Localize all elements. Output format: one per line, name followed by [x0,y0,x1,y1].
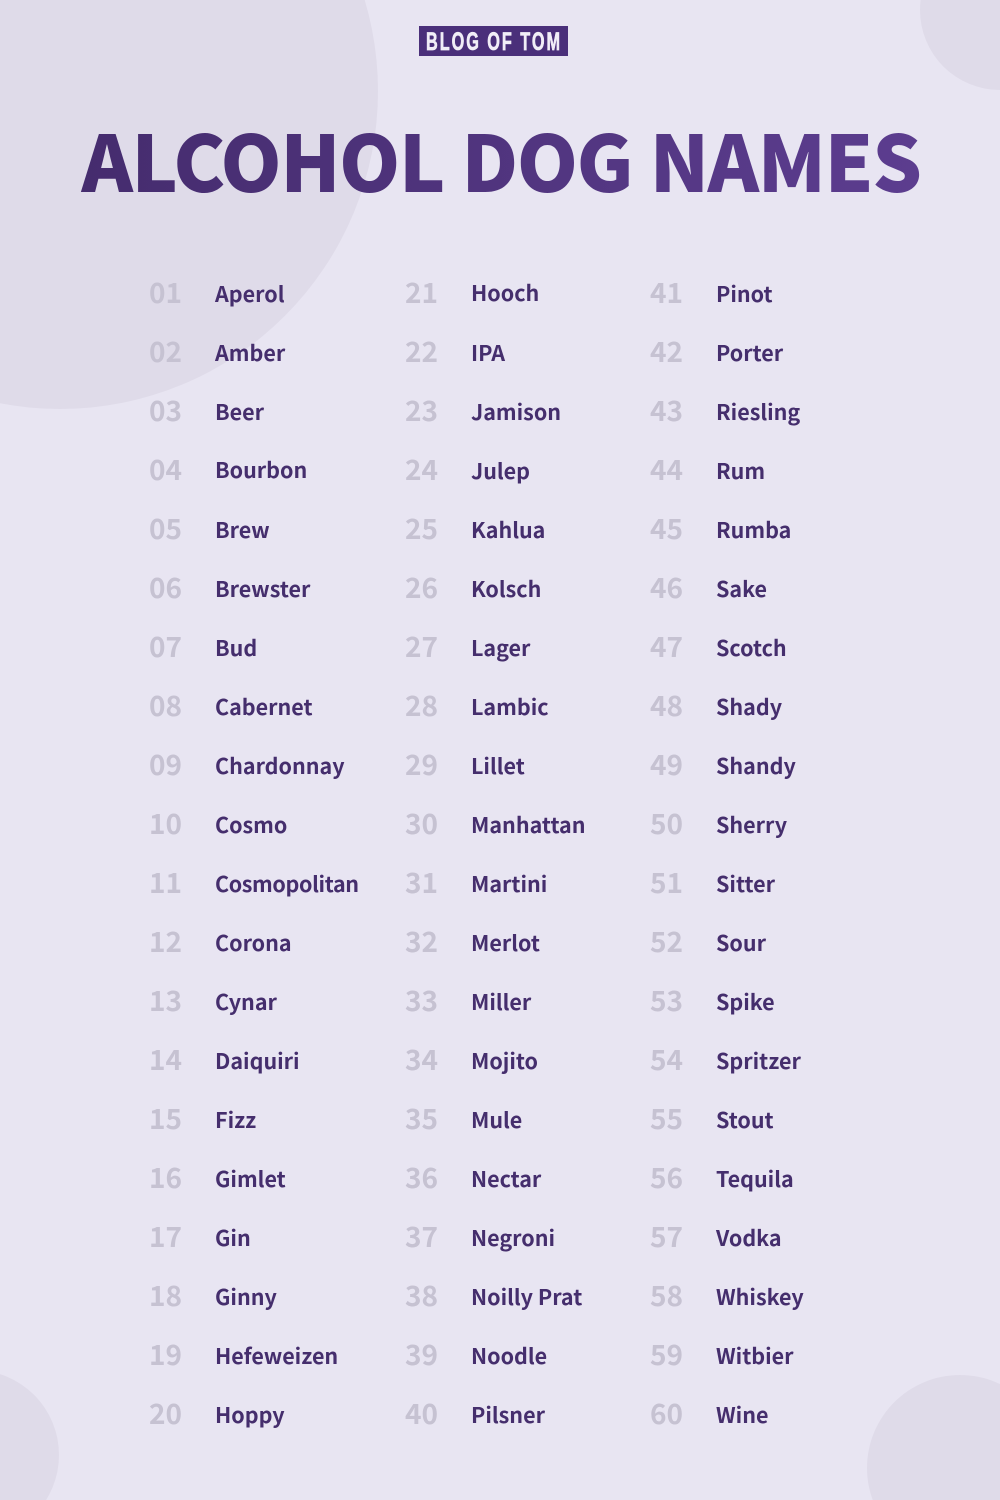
name 37 [405,1216,555,1256]
name 48: 48 [650,685,683,725]
name 27 [405,626,530,666]
name 04: 04 [149,449,182,489]
name 12: Corona [215,927,292,958]
name 31 [405,862,547,902]
name 05: Brew [215,514,270,545]
name 28: Lambic [471,691,549,722]
name 21 [405,272,539,312]
name 54: 54 [650,1039,683,1079]
name 51: Sitter [716,868,775,899]
name 04 [149,449,307,489]
name 02 [149,331,286,371]
name 03 [149,390,264,430]
name 29 [405,744,525,784]
name 44: 44 [650,449,683,489]
column: names 01-20 [149,272,359,1433]
name 57 [650,1207,890,1266]
name 38 [405,1275,582,1315]
name 05: 05 [149,508,182,548]
name 17: Gin [215,1222,251,1253]
name 45 [650,499,890,558]
name 06: Brewster [215,573,310,604]
name 15: Fizz [215,1104,256,1135]
name 50: Sherry [716,809,787,840]
name 24: Julep [471,455,530,486]
name 02: 02 [149,331,182,371]
name 31: Martini [471,868,547,899]
name 45: 45 [650,508,683,548]
name 12: 12 [149,921,182,961]
name 22 [405,331,506,371]
background circle: bottom right [867,1375,1000,1500]
name 20 [149,1393,285,1433]
name 14: Daiquiri [215,1045,300,1076]
name 29: Lillet [471,750,525,781]
name 28: 28 [405,685,438,725]
name 60: Wine [716,1399,768,1430]
name 11: Cosmopolitan [215,868,359,899]
name 53: 53 [650,980,683,1020]
name 41 [650,263,890,322]
name 55 [650,1089,890,1148]
name 21: Hooch [471,277,539,308]
name 58: 58 [650,1275,683,1315]
name 34: Mojito [471,1045,538,1076]
name 44: Rum [716,455,765,486]
name 23: Jamison [471,396,561,427]
name 11: 11 [149,862,182,902]
name 09: 09 [149,744,182,784]
name 09: Chardonnay [215,750,345,781]
name 46: Sake [716,573,767,604]
name 52 [650,912,890,971]
name 04: Bourbon [215,454,307,485]
name 57: 57 [650,1216,683,1256]
name 35 [405,1098,522,1138]
name 26: 26 [405,567,438,607]
name 33: 33 [405,980,438,1020]
name 23: 23 [405,390,438,430]
name 40: Pilsner [471,1399,545,1430]
name 01 [149,272,284,312]
name 55: 55 [650,1098,683,1138]
name 16: 16 [149,1157,182,1197]
name 49: 49 [650,744,683,784]
name 30 [405,803,586,843]
name 08: Cabernet [215,691,313,722]
background circle: top left [0,0,378,409]
name 38: Noilly Prat [471,1281,582,1312]
name 16 [149,1157,286,1197]
name 10 [149,803,287,843]
name 07: 07 [149,626,182,666]
name 39: 39 [405,1334,438,1374]
name 42: Porter [716,337,783,368]
name 07: Bud [215,632,257,663]
name 42: 42 [650,331,683,371]
name 01: Aperol [215,278,284,309]
name 26 [405,567,541,607]
name 20: 20 [149,1393,182,1433]
name 22: 22 [405,331,438,371]
name 42 [650,322,890,381]
name 06: 06 [149,567,182,607]
name 37: Negroni [471,1222,555,1253]
name 48: Shady [716,691,782,722]
name 05 [149,508,270,548]
name 57: Vodka [716,1222,782,1253]
name 13: 13 [149,980,182,1020]
name 49 [650,735,890,794]
name 36 [405,1157,542,1197]
name 60: 60 [650,1393,683,1433]
name 07 [149,626,257,666]
name 38: 38 [405,1275,438,1315]
name 17 [149,1216,251,1256]
name 50: 50 [650,803,683,843]
name 28 [405,685,549,725]
name 27: Lager [471,632,530,663]
name 20: Hoppy [215,1399,285,1430]
name 60 [650,1384,890,1443]
name 08: 08 [149,685,182,725]
name 52: Sour [716,927,766,958]
name 45: Rumba [716,514,791,545]
name 52: 52 [650,921,683,961]
name 18 [149,1275,277,1315]
name 47 [650,617,890,676]
name 25 [405,508,545,548]
name 37: 37 [405,1216,438,1256]
name 13 [149,980,277,1020]
name 02: Amber [215,337,285,368]
name 53: Spike [716,986,775,1017]
name 12 [149,921,292,961]
name 33: Miller [471,986,531,1017]
name 35: Mule [471,1104,522,1135]
name 25: Kahlua [471,514,545,545]
name 40 [405,1384,645,1443]
name 29: 29 [405,744,438,784]
name 34 [405,1039,538,1079]
name 40: 40 [405,1393,438,1433]
name 50 [650,794,890,853]
name 25: 25 [405,508,438,548]
name 53 [650,971,890,1030]
name 32: 32 [405,921,438,961]
name 10: Cosmo [215,809,287,840]
name 18: Ginny [215,1281,277,1312]
name 32 [405,921,540,961]
name 27: 27 [405,626,438,666]
name 55: Stout [716,1104,774,1135]
name 33 [405,980,532,1020]
name 19: Hefeweizen [215,1340,338,1371]
name 51 [650,853,890,912]
name 09 [149,744,345,784]
name 19: 19 [149,1334,182,1374]
name 15 [149,1098,256,1138]
name 59: Witbier [716,1340,794,1371]
name 03: Beer [215,396,264,427]
name 48 [650,676,890,735]
name 36: 36 [405,1157,438,1197]
name 39 [405,1325,645,1384]
title: ALCOHOL DOG NAMES [81,103,921,215]
name 26: Kolsch [471,573,541,604]
name 56 [650,1148,890,1207]
name 59 [650,1325,890,1384]
name 22: IPA [471,337,505,368]
name 16: Gimlet [215,1163,286,1194]
name 19 [149,1334,338,1374]
name 21: 21 [405,272,438,312]
name 56: Tequila [716,1163,794,1194]
name 35: 35 [405,1098,438,1138]
name 34: 34 [405,1039,438,1079]
name 54: Spritzer [716,1045,801,1076]
name 58: Whiskey [716,1281,804,1312]
name 47: Scotch [716,632,787,663]
name 03: 03 [149,390,182,430]
name 59: 59 [650,1334,683,1374]
name 43: 43 [650,390,683,430]
name 41: 41 [650,272,683,312]
background circle: bottom left [0,1370,59,1500]
name 11 [149,862,359,902]
column: names 41-60 [650,263,890,1443]
name 36: Nectar [471,1163,541,1194]
name 14: 14 [149,1039,182,1079]
name 32: Merlot [471,927,540,958]
name 23 [405,390,561,430]
name 14 [149,1039,300,1079]
column: names 21-40 [405,272,586,1433]
name 08 [149,685,313,725]
name 18: 18 [149,1275,182,1315]
name 30: 30 [405,803,438,843]
name 17: 17 [149,1216,182,1256]
name 46: 46 [650,567,683,607]
name 56: 56 [650,1157,683,1197]
name 54 [650,1030,890,1089]
name 31: 31 [405,862,438,902]
name 24: 24 [405,449,438,489]
name 15: 15 [149,1098,182,1138]
name 49: Shandy [716,750,796,781]
name 46 [650,558,890,617]
name 30: Manhattan [471,809,586,840]
background circle: top right [920,0,1000,90]
name 24 [405,449,530,489]
name 58 [650,1266,890,1325]
name 41: Pinot [716,278,773,309]
name 06 [149,567,310,607]
name 10: 10 [149,803,182,843]
name 01: 01 [149,272,182,312]
name 43: Riesling [716,396,800,427]
name 47: 47 [650,626,683,666]
name 13: Cynar [215,986,277,1017]
name 51: 51 [650,862,683,902]
name 44 [650,440,890,499]
name 43 [650,381,890,440]
name 39: Noodle [471,1340,547,1371]
